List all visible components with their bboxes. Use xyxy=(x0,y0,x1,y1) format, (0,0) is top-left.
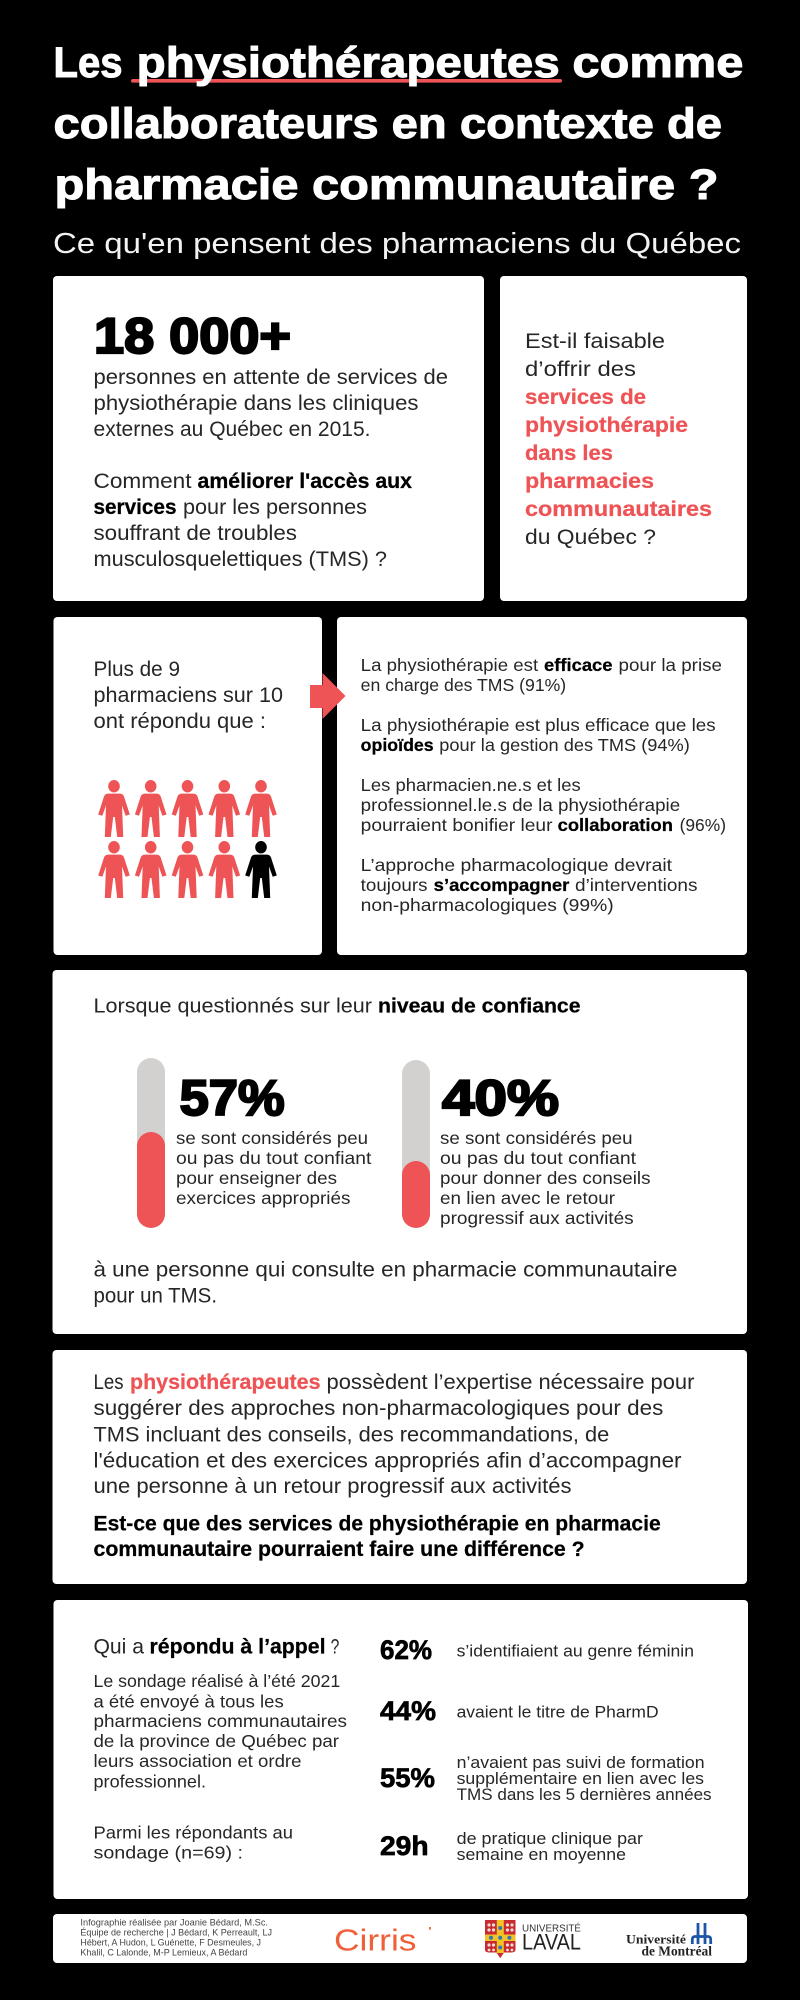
panel: footer credits and logos xyxy=(53,1914,747,1963)
panel: feasibility question: Est-il faisable xyxy=(525,330,665,353)
stat 40%: ou pas du tout confiant xyxy=(440,1148,636,1168)
stat 40%: pour donner des conseils xyxy=(440,1168,651,1188)
stat 29h: de pratique clinique par xyxy=(457,1829,644,1848)
survey description: pharmaciens communautaires xyxy=(94,1711,347,1731)
stat 40%: 40% xyxy=(442,1070,559,1126)
gauge 57% xyxy=(137,1058,165,1228)
stat 55%: 55% xyxy=(380,1763,435,1793)
panel: physiotherapists expertise: TMS incluant des conseils, des recommandations, de xyxy=(94,1423,609,1446)
title xyxy=(54,40,743,209)
stat 44% xyxy=(380,1696,659,1726)
stat 57% xyxy=(176,1070,372,1208)
stat 57%: 57% xyxy=(180,1070,285,1126)
survey description: Le sondage réalisé à l’été 2021 xyxy=(94,1671,340,1691)
panel: survey findings: pourraient bonifier leur xyxy=(361,815,553,835)
credits: Khalil, C Lalonde, M-P Lemieux, A Bédard xyxy=(80,1948,247,1959)
panel: survey findings: d’interventions xyxy=(575,875,698,895)
who responded heading: répondu à l’appel xyxy=(150,1636,326,1658)
stat 55% xyxy=(380,1753,712,1804)
panel: survey findings: opioïdes xyxy=(361,735,434,755)
panel: physiotherapists expertise: suggérer des approches non-pharmacologiques pour des xyxy=(94,1397,663,1420)
panel: physiotherapists expertise: possèdent l’expertise nécessaire pour xyxy=(326,1371,694,1394)
survey description xyxy=(94,1671,347,1862)
logo: Université Laval: UNIVERSITÉ xyxy=(522,1922,581,1935)
who responded heading: ? xyxy=(331,1636,339,1658)
confidence heading: Lorsque questionnés sur leur xyxy=(94,996,372,1018)
panel: physiotherapists expertise: communautaire pourraient faire une différence ? xyxy=(94,1538,585,1561)
panel: feasibility question: communautaires xyxy=(525,498,712,521)
stat 29h: semaine en moyenne xyxy=(457,1845,626,1864)
panel: survey findings: s’accompagner xyxy=(434,875,570,895)
panel: feasibility question: du Québec ? xyxy=(525,526,656,549)
panel: physiotherapists expertise: Les xyxy=(94,1371,124,1394)
panel: physiotherapists expertise xyxy=(52,1350,747,1584)
stat 29h xyxy=(380,1829,644,1864)
stat 57%: ou pas du tout confiant xyxy=(176,1148,372,1168)
logo: Université Laval: LAVAL xyxy=(522,1930,581,1955)
waiting list text xyxy=(94,366,448,571)
stat 55%: n’avaient pas suivi de formation xyxy=(457,1753,705,1772)
intro text: pharmaciens sur 10 xyxy=(94,684,283,707)
panel: feasibility question: dans les xyxy=(525,442,613,465)
stat 40%: progressif aux activités xyxy=(440,1208,634,1228)
stat 62%: 62% xyxy=(380,1635,432,1665)
title: collaborateurs en contexte de xyxy=(54,101,722,148)
panel: physiotherapists expertise: Est-ce que des services de physiothérapie en pharmacie xyxy=(94,1513,661,1536)
big number: 18 000+ xyxy=(94,308,291,364)
logo: Université Laval xyxy=(485,1920,581,1958)
credits: Hébert, A Hudon, L Guénette, F Desmeules, J xyxy=(80,1938,261,1949)
stat 40%: se sont considérés peu xyxy=(440,1128,633,1148)
stat 55%: TMS dans les 5 dernières années xyxy=(457,1785,712,1804)
waiting list text: services xyxy=(94,496,176,519)
confidence conclusion: pour un TMS. xyxy=(94,1285,217,1308)
panel: confidence level xyxy=(52,970,747,1334)
panel: survey findings: en charge des TMS (91%) xyxy=(361,675,566,695)
panel: survey findings: Les pharmacien.ne.s et les xyxy=(361,775,581,795)
panel: 9 pharmacists out of 10 xyxy=(54,617,322,955)
panel: feasibility question: pharmacies xyxy=(525,470,654,493)
intro text: Plus de 9 xyxy=(94,658,180,681)
title: Les xyxy=(54,40,122,87)
stat 44%: 44% xyxy=(380,1696,436,1726)
panel: survey findings: toujours xyxy=(361,875,428,895)
stat 40% xyxy=(440,1070,651,1228)
stat 44%: avaient le titre de PharmD xyxy=(457,1702,659,1722)
credits: Infographie réalisée par Joanie Bédard, M.Sc. xyxy=(80,1918,268,1929)
panel: who responded xyxy=(54,1600,748,1899)
panel: survey findings xyxy=(337,617,747,955)
panel: survey findings: La physiothérapie est xyxy=(361,655,538,675)
panel: survey findings: pour la gestion des TMS (94%) xyxy=(439,735,690,755)
waiting list text: Comment xyxy=(94,470,192,493)
panel: feasibility question: d’offrir des xyxy=(525,358,636,381)
panel: feasibility question xyxy=(500,276,747,601)
waiting list text: physiothérapie dans les cliniques xyxy=(94,392,418,415)
logo: Université de Montréal: de Montréal xyxy=(642,1943,712,1958)
panel: survey findings: L’approche pharmacologique devrait xyxy=(361,855,672,875)
panel: feasibility question: physiothérapie xyxy=(525,414,688,437)
intro text: ont répondu que : xyxy=(94,710,266,733)
survey description: de la province de Québec par xyxy=(94,1731,339,1751)
survey description: Parmi les répondants au xyxy=(94,1823,293,1843)
panel: physiotherapists expertise: physiothérapeutes xyxy=(130,1371,320,1394)
credits xyxy=(80,1918,272,1959)
gauge 40% xyxy=(402,1060,430,1228)
stat 55%: supplémentaire en lien avec les xyxy=(457,1769,704,1788)
panel: feasibility question: services de xyxy=(525,386,646,409)
panel: physiotherapists expertise: l'éducation et des exercices appropriés afin d’accompagner xyxy=(94,1450,682,1472)
subtitle: Ce qu'en pensent des pharmaciens du Québec xyxy=(53,228,741,260)
waiting list text: personnes en attente de services de xyxy=(94,366,448,389)
waiting list text: pour les personnes xyxy=(183,496,367,519)
stat 57%: pour enseigner des xyxy=(176,1168,337,1188)
stat 62% xyxy=(380,1635,694,1665)
panel: survey findings: (96%) xyxy=(680,815,726,835)
logo: Université de Montréal xyxy=(626,1923,712,1958)
stat 29h: 29h xyxy=(380,1831,429,1861)
confidence heading xyxy=(94,996,580,1018)
title: pharmacie communautaire ? xyxy=(54,162,718,209)
intro text xyxy=(94,658,283,733)
who responded heading: Qui a xyxy=(94,1636,144,1658)
panel: survey findings: efficace xyxy=(544,655,613,675)
credits: Équipe de recherche | J Bédard, K Perreault, LJ xyxy=(80,1928,272,1939)
waiting list text: améliorer l'accès aux xyxy=(198,470,412,493)
survey description: sondage (n=69) : xyxy=(94,1842,243,1862)
title: physiothérapeutes xyxy=(137,40,560,87)
survey description: professionnel. xyxy=(94,1771,206,1791)
stat 62%: s’identifiaient au genre féminin xyxy=(457,1642,694,1660)
waiting list text: externes au Québec en 2015. xyxy=(94,418,370,441)
logo: Cirris: Cirris xyxy=(334,1923,416,1958)
panel: survey findings: non-pharmacologiques (99%) xyxy=(361,895,614,915)
stat 57%: exercices appropriés xyxy=(176,1188,351,1208)
survey description: leurs association et ordre xyxy=(94,1751,302,1771)
panel: survey findings: collaboration xyxy=(558,815,673,835)
waiting list text: musculosquelettiques (TMS) ? xyxy=(94,548,387,571)
panel: survey findings: pour la prise xyxy=(618,655,722,675)
panel: physiotherapists expertise: une personne à un retour progressif aux activités xyxy=(94,1475,572,1498)
panel: survey findings: professionnel.le.s de la physiothérapie xyxy=(361,795,680,815)
icon: people pictogram 9 of 10 xyxy=(98,780,277,898)
arrow xyxy=(310,673,346,719)
panel: waiting list xyxy=(53,276,484,601)
stat 57%: se sont considérés peu xyxy=(176,1128,368,1148)
confidence conclusion xyxy=(94,1259,678,1308)
confidence conclusion: à une personne qui consulte en pharmacie communautaire xyxy=(94,1259,678,1282)
panel: survey findings: La physiothérapie est plus efficace que les xyxy=(361,715,716,735)
confidence heading: niveau de confiance xyxy=(378,996,580,1018)
logo: Université de Montréal: Université xyxy=(626,1931,686,1946)
title: comme xyxy=(572,40,743,87)
waiting list text: souffrant de troubles xyxy=(94,522,297,545)
stat 40%: en lien avec le retour xyxy=(440,1188,615,1208)
survey description: a été envoyé à tous les xyxy=(94,1691,284,1711)
